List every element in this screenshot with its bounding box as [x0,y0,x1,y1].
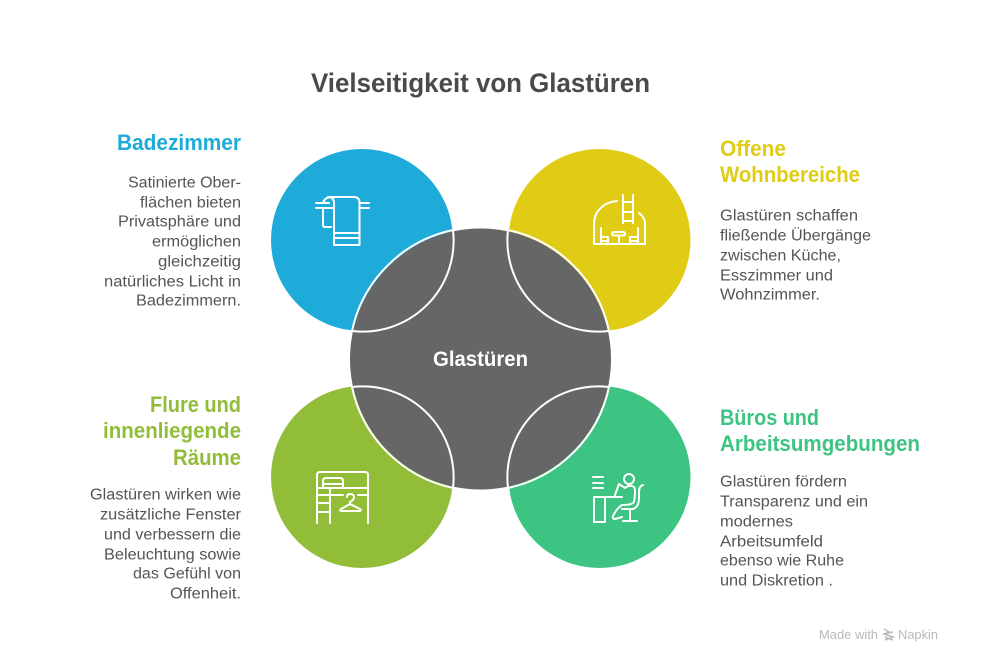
heading: innenliegende [103,418,241,443]
body text: Transparenz und ein [720,494,868,510]
panel: Offene Wohnbereiche [720,136,871,304]
watermark [819,628,938,642]
heading: Wohnbereiche [720,162,860,187]
body text: natürliches Licht in [104,274,241,290]
body text: Glastüren schaffen [720,208,858,224]
icon: open living room [594,195,645,244]
body text: Glastüren wirken wie [90,486,241,504]
body text: Offenheit. [170,586,241,602]
body text: fließende Übergänge [720,226,871,244]
body text: zwischen Küche, [720,248,841,264]
body text: Privatsphäre und [118,214,241,230]
icon: person at desk [593,474,643,522]
circle: Offene Wohnbereiche [508,149,690,331]
body text: Arbeitsumfeld [720,534,823,550]
body text: und verbessern die [104,526,241,544]
watermark: Made with [819,628,878,642]
heading [720,405,920,456]
body text [104,174,241,310]
body text: Esszimmer und [720,268,833,284]
body text: das Gefühl von [133,566,241,582]
central label: Glastüren [433,348,528,371]
heading: Büros und [720,405,819,430]
title: Vielseitigkeit von Glastüren [311,68,650,98]
heading: Arbeitsumgebungen [720,431,920,456]
icon: loft bed and hanger [317,472,368,523]
panel: Büros und Arbeitsumgebungen [720,405,920,590]
body text: gleichzeitig [158,254,241,270]
heading: Räume [173,445,241,470]
body text: Beleuchtung sowie [104,546,241,564]
heading: Flure und [150,392,241,417]
heading: Badezimmer [117,130,241,155]
panel: Badezimmer [104,130,241,310]
watermark: Napkin [898,628,938,642]
heading: Offene [720,136,786,161]
overlap outlines [352,230,609,488]
panel: Flure und innenliegende Räume [90,392,241,602]
body text: flächen bieten [140,194,241,212]
body text [90,486,241,602]
central circle [350,228,611,490]
body text: zusätzliche Fenster [100,506,241,524]
body text: modernes [720,514,793,530]
icon: towel [316,197,369,245]
body text: Wohnzimmer. [720,286,820,304]
body text [720,208,871,304]
body text: ermöglichen [152,234,241,250]
circle: Büros und Arbeitsumgebungen [508,386,690,568]
body text: Satinierte Ober- [128,174,241,192]
heading [720,136,860,187]
circle: Badezimmer [271,149,453,331]
body text: Badezimmern. [136,292,241,310]
body text: und Diskretion . [720,572,833,590]
body text: Glastüren fördern [720,474,847,490]
heading [103,392,241,470]
circle: Flure und innenliegende Räume [271,386,453,568]
body text: ebenso wie Ruhe [720,552,844,570]
body text [720,474,868,590]
